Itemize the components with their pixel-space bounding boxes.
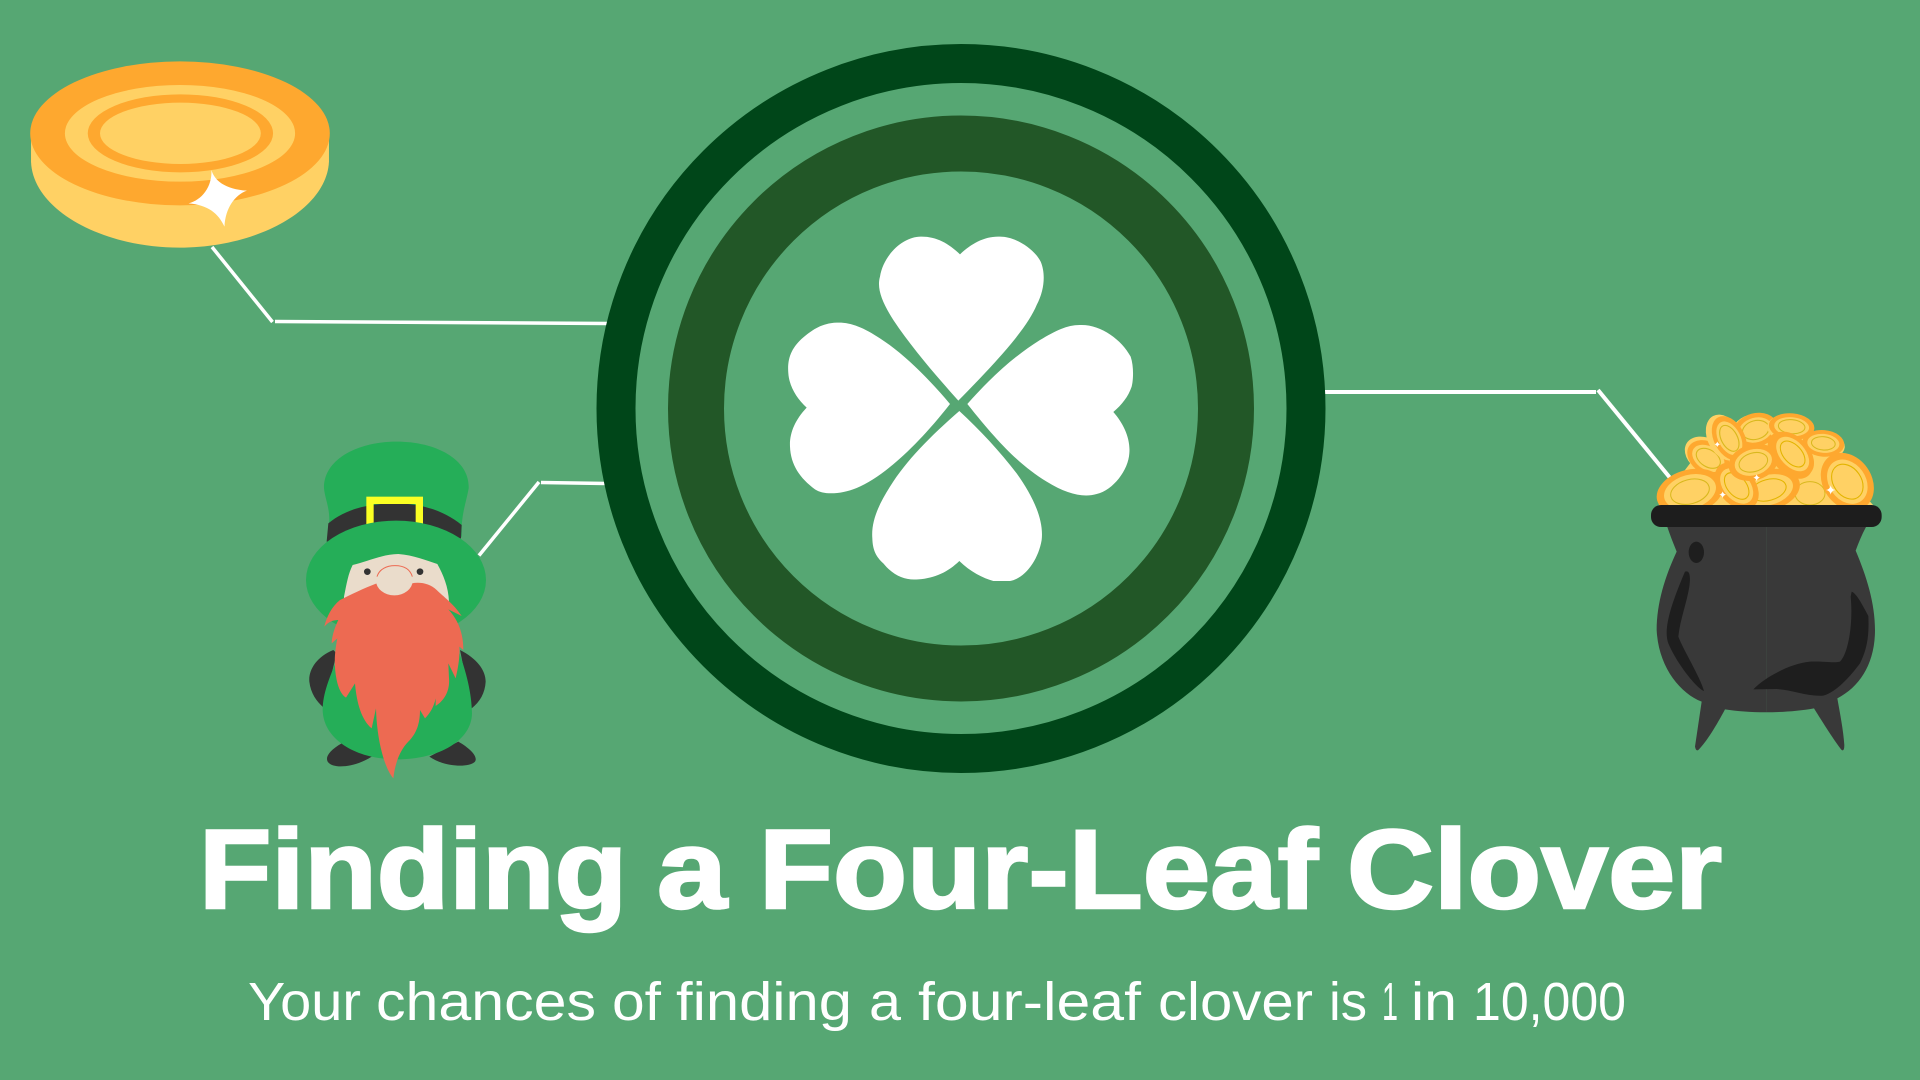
cauldron body	[1657, 527, 1875, 750]
cauldron rim	[1651, 505, 1882, 527]
leprechaun body	[323, 650, 472, 759]
outer dark ring	[616, 64, 1306, 754]
icon: leprechaun	[306, 442, 486, 778]
inner ring	[696, 144, 1226, 674]
leprechaun nose	[376, 566, 413, 595]
clover badge	[616, 64, 1306, 754]
subtitle: of	[612, 972, 662, 1032]
leprechaun feet	[327, 742, 476, 766]
subtitle: clover	[1158, 972, 1313, 1032]
subtitle: in	[1411, 972, 1457, 1032]
connector: leprechaun to clover	[479, 482, 606, 556]
title: Four-Leaf	[759, 807, 1319, 932]
title: Finding	[199, 807, 627, 932]
icon: four-leaf clover	[788, 237, 1133, 581]
subtitle: chances	[376, 972, 596, 1032]
subtitle: 10,000	[1473, 972, 1626, 1032]
leprechaun beard	[324, 583, 463, 778]
subtitle: is	[1329, 972, 1367, 1032]
connector: clover to pot of gold	[1320, 390, 1671, 479]
leprechaun hat	[306, 442, 486, 639]
subtitle: finding	[676, 972, 852, 1032]
pile of gold coins	[1656, 412, 1874, 506]
subtitle: 1	[1382, 972, 1398, 1032]
leprechaun face	[344, 554, 449, 602]
cauldron shading	[1667, 542, 1869, 696]
icon: gold coin	[30, 61, 330, 248]
icon: pot of gold	[1651, 407, 1885, 750]
subtitle: Your	[248, 972, 361, 1032]
leprechaun arms	[309, 650, 486, 708]
title: Clover	[1347, 807, 1722, 932]
connector: coin to clover	[212, 247, 608, 324]
subtitle: a	[869, 972, 902, 1032]
subtitle: four-leaf	[918, 972, 1142, 1032]
title: a	[657, 807, 728, 932]
